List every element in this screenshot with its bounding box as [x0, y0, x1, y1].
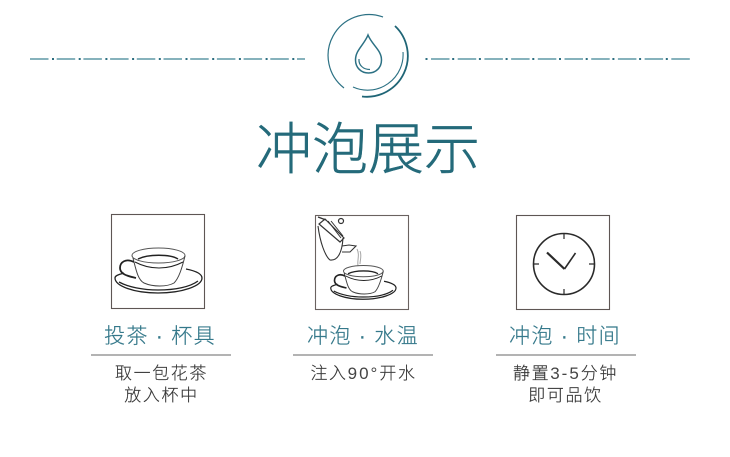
panel: clock frame: [516, 216, 610, 310]
icon: water stream: [357, 249, 361, 266]
text: cup instructions: 取一包花茶: [115, 364, 208, 383]
icon: teapot: [318, 217, 356, 260]
text: cup instructions: 放入杯中: [124, 386, 199, 405]
icon: clock: [534, 234, 594, 295]
left dashed line: [30, 58, 305, 60]
text: time: 静置3-5分钟: [513, 364, 618, 383]
heading: time: 冲泡 · 时间: [509, 325, 621, 348]
title: 冲泡展示: [256, 118, 480, 181]
text: cup instructions: [115, 364, 208, 405]
panel: teapot frame: [316, 216, 408, 310]
icon: teapot pouring into cup: [318, 217, 396, 299]
text: water temperature: 注入90°开水: [310, 364, 417, 383]
heading: cup: 投茶 · 杯具: [104, 325, 216, 348]
icon: tea cup and saucer: [115, 248, 202, 293]
panel: cup frame: [112, 214, 204, 308]
divider rules: [91, 354, 636, 356]
text: time: 即可品饮: [528, 386, 603, 405]
heading: water temperature: 冲泡 · 水温: [307, 325, 419, 348]
icon: small cup: [331, 266, 396, 299]
icon: water drop in rings: [328, 15, 408, 97]
right dashed line: [426, 58, 690, 60]
text: time: [513, 364, 618, 405]
